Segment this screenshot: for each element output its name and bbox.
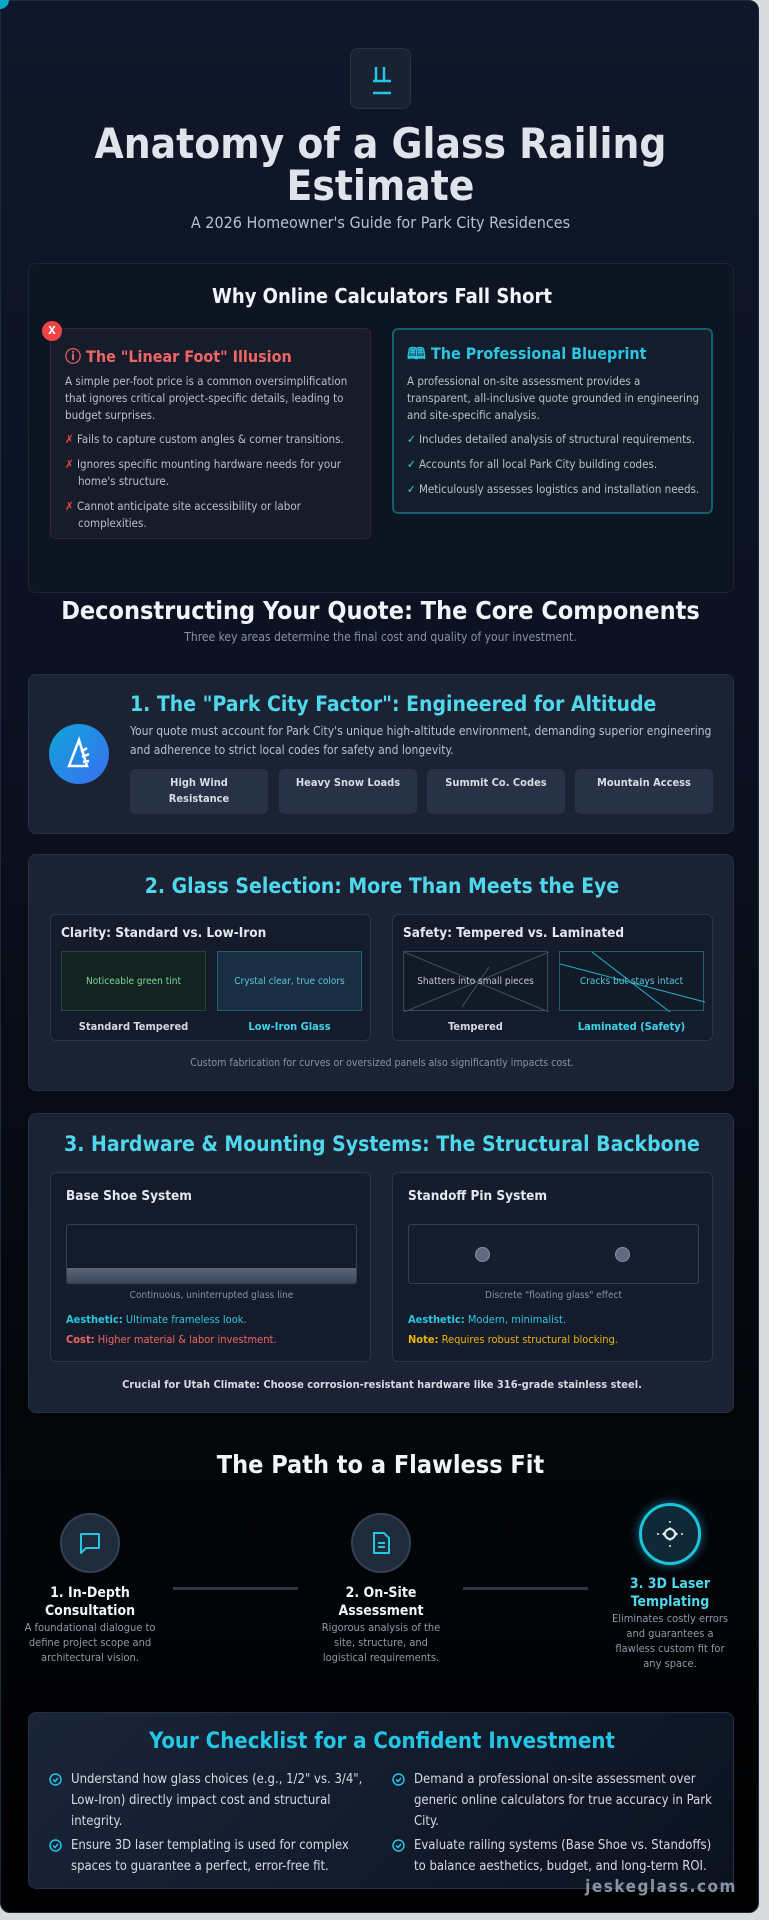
heading: Why Online Calculators Fall Short [212, 284, 552, 308]
list: ✗ Cannot anticipate site accessibility or labor complexities. [65, 499, 301, 530]
card: clarity: Clarity: Standard vs. Low-Iron [61, 925, 266, 941]
section subtitle: Three key areas determine the final cost and quality of your investment. [184, 630, 577, 644]
chips: Mountain Access [597, 776, 691, 789]
card: professional blueprint [392, 328, 713, 514]
icon: chat [60, 1513, 120, 1573]
card: safety [392, 914, 713, 1041]
checklist items: Ensure 3D laser templating is used for complex spaces to guarantee a perfect, error-free fit. [71, 1838, 349, 1874]
corner dot [0, 0, 9, 9]
card: base shoe: Aesthetic: Ultimate frameless look. [66, 1313, 247, 1326]
list: ✓ Meticulously assesses logistics and installation needs. [407, 482, 699, 496]
list: ✗ Ignores specific mounting hardware needs for your home's structure. [65, 457, 341, 488]
checklist items: Demand a professional on-site assessment over generic online calculators for true accuracy in Park City. [414, 1772, 712, 1829]
step 3 [612, 1496, 728, 1670]
checklist items [49, 1772, 712, 1874]
card: standoff [392, 1172, 713, 1362]
card: linear foot illusion [50, 328, 371, 539]
card: safety: Tempered [448, 1020, 503, 1033]
card: safety: Safety: Tempered vs. Laminated [403, 925, 624, 941]
icon: document [351, 1513, 411, 1573]
chips [130, 769, 713, 814]
list [407, 432, 699, 496]
list [65, 432, 344, 530]
title: Anatomy of a Glass Railing [95, 119, 666, 168]
connector lines [173, 1587, 298, 1590]
chips: Summit Co. Codes [445, 776, 547, 789]
card: standoff: Aesthetic: Modern, minimalist. [408, 1313, 566, 1326]
heading: 2. Glass Selection: More Than Meets the Eye [145, 874, 619, 898]
panel: hardware [28, 1113, 734, 1413]
heading: ⓘ The "Linear Foot" Illusion [65, 347, 292, 366]
list: ✓ Accounts for all local Park City building codes. [407, 457, 657, 471]
footnote: Custom fabrication for curves or oversized panels also significantly impacts cost. [190, 1057, 574, 1069]
card: base shoe [50, 1172, 371, 1362]
panel: why online calculators fall short [28, 263, 734, 593]
card: clarity: Standard Tempered [79, 1020, 188, 1033]
card: safety: Shatters into small pieces [417, 976, 534, 986]
text: Your quote must account for Park City's unique high-altitude environment, demanding superior engineering and adherence to strict local codes for safety and longevity. [130, 724, 711, 757]
checklist items: Evaluate railing systems (Base Shoe vs. Standoffs) to balance aesthetics, budget, and long-term ROI. [414, 1838, 711, 1874]
card: standoff: Note: Requires robust structural blocking. [408, 1333, 618, 1346]
card: standoff: Standoff Pin System [408, 1188, 547, 1204]
standoff diagram [408, 1224, 699, 1284]
title [94, 119, 666, 210]
subtitle: A 2026 Homeowner's Guide for Park City Residences [191, 213, 570, 232]
heading: 🕮 The Professional Blueprint [407, 344, 647, 363]
chips: Resistance [169, 792, 229, 805]
panel: checklist [28, 1712, 734, 1889]
list: ✗ Fails to capture custom angles & corner transitions. [65, 432, 344, 446]
watermark: jeskeglass.com [585, 1877, 737, 1897]
heading: 3. Hardware & Mounting Systems: The Structural Backbone [64, 1132, 700, 1156]
step 2 [322, 1513, 440, 1664]
text: A foundational dialogue to define project scope and architectural vision. [25, 1621, 155, 1664]
text: 2. On-Site [346, 1585, 416, 1601]
card: base shoe: Continuous, uninterrupted glass line [130, 1290, 293, 1301]
card: safety: Laminated (Safety) [578, 1020, 685, 1033]
card: standoff: Discrete "floating glass" effect [485, 1290, 622, 1301]
icon: laser eye [639, 1503, 701, 1565]
checklist items: Understand how glass choices (e.g., 1/2" vs. 3/4", Low-Iron) directly impact cost and structural integrity. [71, 1772, 362, 1829]
panel: park city factor [28, 674, 734, 834]
card: base shoe: Cost: Higher material & labor investment. [66, 1333, 277, 1346]
list: ✓ Includes detailed analysis of structural requirements. [407, 432, 695, 446]
text: Assessment [339, 1603, 423, 1619]
card: clarity: Crystal clear, true colors [234, 976, 345, 986]
text: Rigorous analysis of the site, structure, and logistical requirements. [322, 1621, 440, 1664]
step 1 [24, 1513, 155, 1664]
card: base shoe: Base Shoe System [66, 1188, 192, 1204]
text: 3. 3D Laser [630, 1576, 710, 1592]
heading: Your Checklist for a Confident Investment [149, 1729, 615, 1754]
section heading: Deconstructing Your Quote: The Core Components [61, 596, 700, 625]
heading: 1. The "Park City Factor": Engineered for Altitude [130, 692, 656, 716]
text: A professional on-site assessment provides a transparent, all-inclusive quote grounded in engineering and site-specific analysis. [407, 374, 699, 422]
base shoe diagram [66, 1224, 357, 1284]
card: clarity: Low-Iron Glass [248, 1020, 331, 1033]
chips: High Wind [170, 776, 228, 789]
note: Crucial for Utah Climate: Choose corrosion-resistant hardware like 316-grade stainless steel. [122, 1378, 642, 1391]
icon: red x badge [42, 321, 62, 341]
chips: Heavy Snow Loads [296, 776, 400, 789]
logo icon [350, 48, 411, 109]
text: Eliminates costly errors and guarantees a flawless custom fit for any space. [612, 1612, 728, 1670]
path heading: The Path to a Flawless Fit [217, 1450, 544, 1479]
icon: red x badge: X [48, 324, 56, 337]
card: clarity: Noticeable green tint [86, 976, 181, 986]
panel: glass selection [28, 854, 734, 1091]
title: Estimate [287, 161, 474, 210]
card: clarity [50, 914, 371, 1041]
text: Templating [631, 1594, 709, 1610]
text: 1. In-Depth [50, 1585, 130, 1601]
text: A simple per-foot price is a common oversimplification that ignores critical project-specific details, leading to budget surprises. [65, 374, 347, 422]
card: safety: Cracks but stays intact [580, 976, 683, 986]
icon: mountain [49, 724, 109, 784]
text: Consultation [45, 1603, 135, 1619]
